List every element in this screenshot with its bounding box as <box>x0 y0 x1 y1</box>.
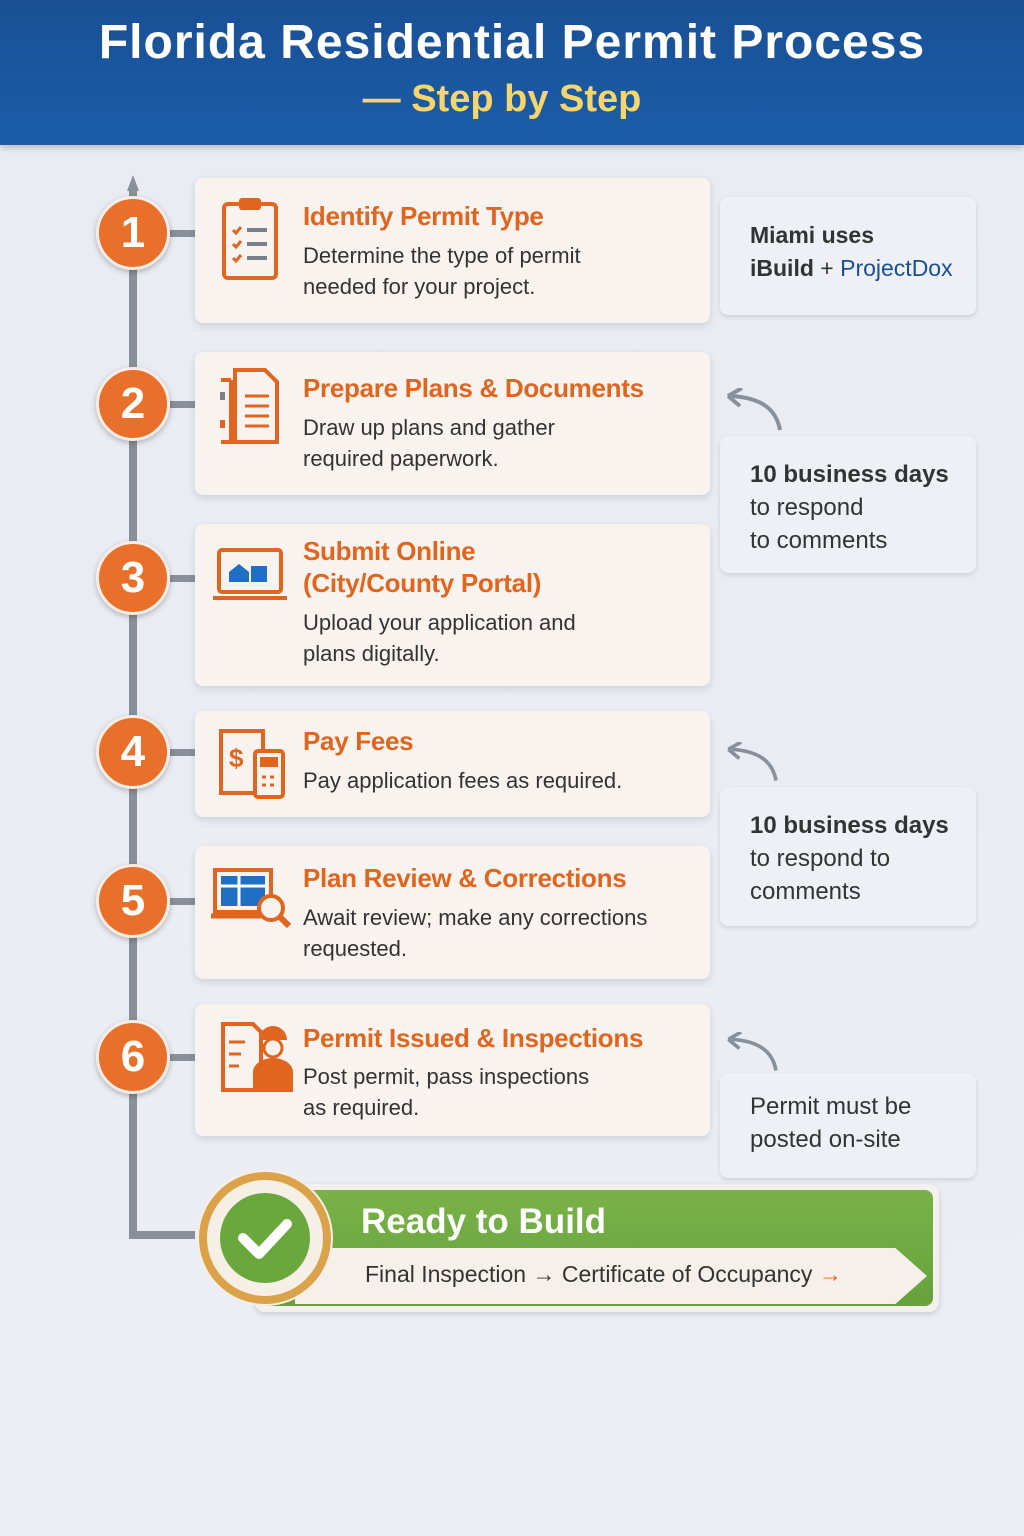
arrow 3 <box>727 1032 778 1071</box>
step 5 number: 5 <box>121 876 145 925</box>
icon: check badge <box>197 1170 333 1306</box>
header <box>0 0 1024 145</box>
arrow 1 <box>726 388 782 430</box>
card 5: requested. <box>303 936 407 961</box>
step 6 number <box>96 1020 170 1094</box>
card 1: needed for your project. <box>303 274 535 299</box>
card 2: required paperwork. <box>303 446 499 471</box>
step 2 number <box>96 367 170 441</box>
icon: laptop <box>213 548 287 600</box>
card 3 <box>195 524 710 686</box>
step 4 number <box>96 715 170 789</box>
banner subtext ribbon <box>295 1248 927 1304</box>
banner heading: Ready to Build <box>361 1202 606 1241</box>
step 4 number: 4 <box>121 727 145 776</box>
icon: fees <box>219 729 285 799</box>
card 5: Plan Review & Corrections <box>303 863 626 893</box>
step 2 number: 2 <box>121 379 145 428</box>
card 3: Upload your application and <box>303 610 576 635</box>
step 1 number <box>96 196 170 270</box>
note: 10 days B <box>720 787 976 926</box>
card 2 <box>195 352 710 495</box>
note: Miami <box>720 197 976 315</box>
subtitle: — Step by Step <box>363 78 641 120</box>
note: posted on-site: Permit must be <box>750 1093 911 1120</box>
note: 10 days B: 10 business days <box>750 812 949 839</box>
card 1 <box>195 178 710 323</box>
banner subtext ribbon: Final Inspection → Certificate of Occupancy → <box>365 1261 842 1287</box>
note: 10 days A <box>720 436 976 573</box>
note: 10 days B: to respond to <box>750 845 890 872</box>
step 3 number <box>96 541 170 615</box>
step 5 number <box>96 864 170 938</box>
icon: fees: $ <box>229 743 244 773</box>
card 1: Determine the type of permit <box>303 243 581 268</box>
icon: inspector <box>221 1022 293 1092</box>
note: 10 days A: 10 business days <box>750 461 949 488</box>
note: 10 days A: to comments <box>750 527 887 554</box>
timeline line <box>127 175 195 1239</box>
card 3: Submit Online <box>303 536 475 566</box>
step 6 number: 6 <box>121 1032 145 1081</box>
step 3 number: 3 <box>121 553 145 602</box>
card 2: Prepare Plans & Documents <box>303 373 644 403</box>
card 1: Identify Permit Type <box>303 201 544 231</box>
icon: documents <box>220 368 279 444</box>
card 4: Pay Fees <box>303 726 413 756</box>
card 6 <box>195 1004 710 1136</box>
note: Miami: iBuild + ProjectDox <box>750 255 953 281</box>
step 1 number: 1 <box>121 208 145 257</box>
note: posted on-site: posted on-site <box>750 1126 901 1153</box>
card 6: Permit Issued & Inspections <box>303 1023 643 1053</box>
icon: clipboard <box>222 198 278 280</box>
card 2: Draw up plans and gather <box>303 415 555 440</box>
note: 10 days A: to respond <box>750 494 863 521</box>
card 4 <box>195 711 710 817</box>
card 3: plans digitally. <box>303 641 440 666</box>
card 6: as required. <box>303 1095 419 1120</box>
card 3: (City/County Portal) <box>303 568 541 598</box>
note: posted on-site <box>720 1073 976 1178</box>
card 5: Await review; make any corrections <box>303 905 647 930</box>
card 4: Pay application fees as required. <box>303 768 622 793</box>
ready to build banner <box>197 1170 941 1316</box>
arrow 2 <box>727 742 778 781</box>
icon: review monitor <box>211 868 292 928</box>
card 6: Post permit, pass inspections <box>303 1064 589 1089</box>
title: Florida Residential Permit Process <box>99 16 925 69</box>
note: Miami: Miami uses <box>750 222 874 248</box>
note: 10 days B: comments <box>750 878 861 905</box>
card 5 <box>195 846 710 979</box>
